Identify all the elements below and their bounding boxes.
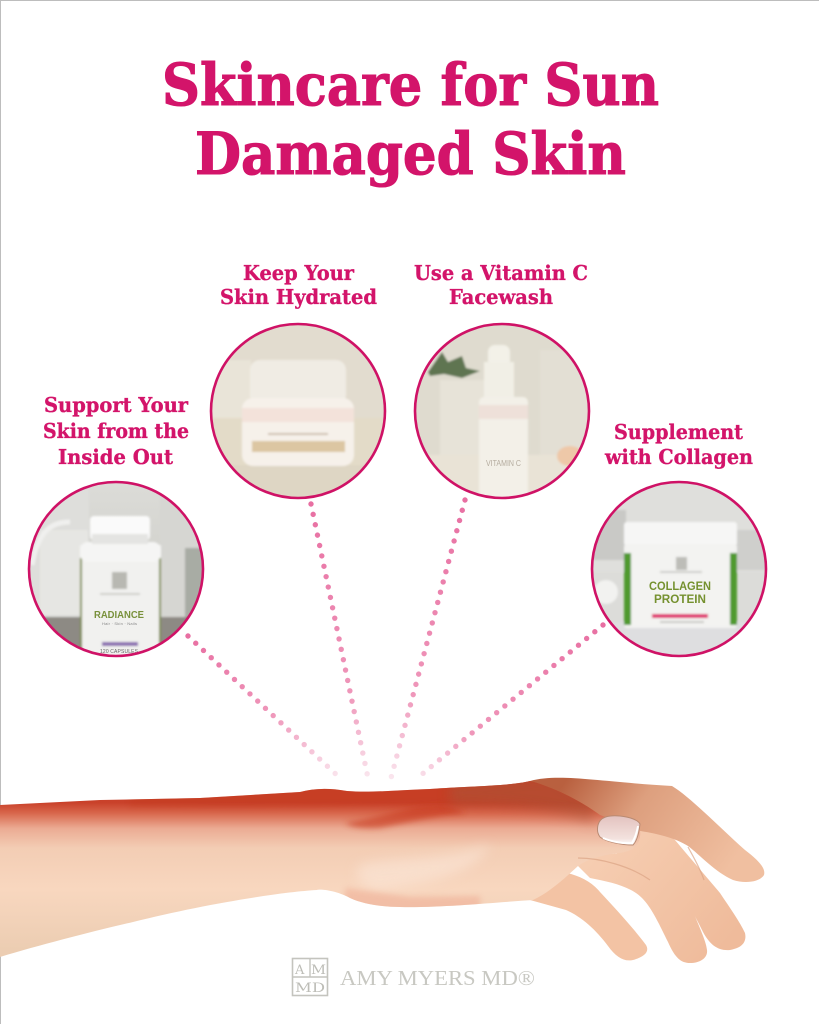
product photo: radiance bottle: Hair · Skin · Nails [102, 621, 137, 626]
product photo: collagen protein tub [592, 482, 766, 656]
logo mark [292, 958, 328, 996]
logo: amy myers md [292, 958, 535, 996]
pinky finger [530, 873, 647, 960]
pink edge under wrist [344, 888, 481, 908]
forearm and back of hand [0, 781, 640, 957]
product photo: vitamin c serum bottle: VITAMIN C [486, 459, 521, 468]
product photo: collagen protein tub: COLLAGEN [649, 579, 711, 593]
ring finger [570, 850, 707, 963]
label: support your skin from the inside out: Support Your [44, 393, 189, 417]
product photo: vitamin c serum bottle [415, 324, 589, 507]
label: use a vitamin c facewash [414, 261, 588, 309]
thumb nail [597, 816, 640, 845]
pale wrist highlight [358, 848, 483, 888]
label: keep your skin hydrated: Skin Hydrated [220, 285, 377, 309]
title: Damaged Skin [195, 120, 626, 188]
product photo: radiance bottle [29, 482, 203, 660]
dotted line: collagen to arm [415, 625, 603, 780]
illustration: sunburned arm and hand [0, 775, 764, 963]
title: Skincare for Sun [162, 51, 659, 119]
sunburn crease [345, 806, 465, 828]
dotted line: radiance to arm [188, 636, 340, 778]
dotted line: facewash to arm [391, 500, 465, 778]
burn and skin shading on the wrist [132, 781, 598, 908]
dotted line: cream to arm [311, 504, 368, 778]
label: keep your skin hydrated [220, 261, 377, 309]
middle finger [610, 825, 745, 950]
logo mark: MD [295, 981, 325, 996]
label: use a vitamin c facewash: Use a Vitamin C [414, 261, 588, 285]
finger creases [578, 847, 704, 880]
title [162, 51, 659, 188]
brown shading at knuckle [450, 781, 598, 825]
label: supplement with collagen: Supplement [614, 420, 743, 444]
logo mark: A [294, 963, 305, 978]
product photo: hydrating cream jar [211, 324, 385, 498]
label: support your skin from the inside out [43, 393, 189, 469]
label: supplement with collagen: with Collagen [604, 445, 753, 469]
logo mark: M [311, 963, 326, 978]
label: supplement with collagen [604, 420, 753, 469]
product photo: radiance bottle: RADIANCE [94, 609, 144, 621]
index finger [530, 778, 764, 882]
label: support your skin from the inside out: Inside Out [58, 445, 173, 469]
label: keep your skin hydrated: Keep Your [243, 261, 355, 285]
product photo: collagen protein tub: PROTEIN [654, 592, 706, 606]
logo wordmark: AMY MYERS MD® [340, 966, 535, 990]
product photo: radiance bottle: 120 CAPSULES [100, 649, 139, 655]
label: use a vitamin c facewash: Facewash [449, 285, 553, 309]
label: support your skin from the inside out: Skin from the [43, 419, 189, 443]
sunburn band along wrist [132, 781, 530, 800]
